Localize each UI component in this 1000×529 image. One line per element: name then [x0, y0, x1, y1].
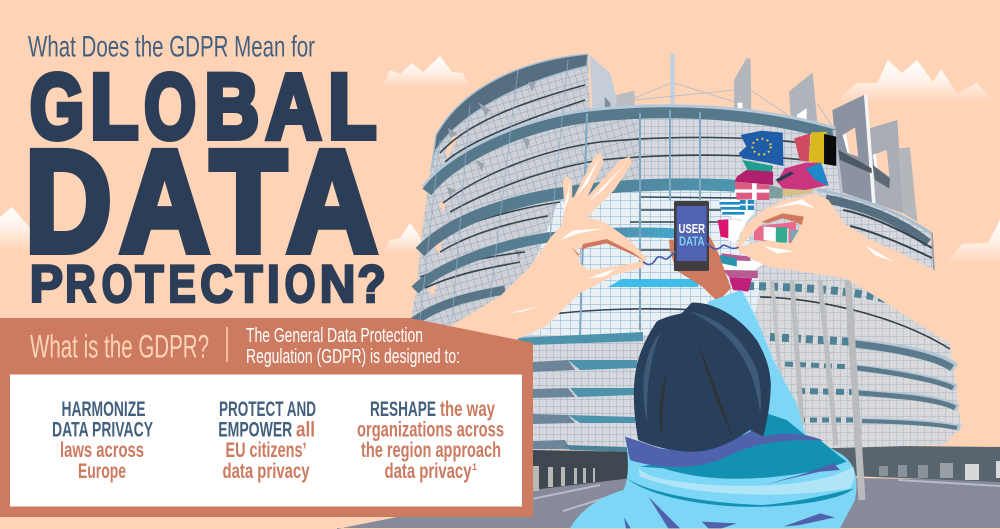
column: protect and empower: PROTECT AND — [219, 398, 316, 421]
title: global — [30, 56, 376, 158]
title: protection: ? — [357, 255, 386, 314]
column: harmonize: HARMONIZE — [62, 398, 146, 421]
hood — [570, 290, 856, 528]
title: data: A — [287, 121, 377, 282]
title: global: B — [204, 56, 259, 158]
building: rotunda body — [411, 55, 962, 450]
column: reshape: data privacy — [384, 460, 472, 483]
panel: what is the GDPR — [0, 318, 533, 517]
title: protection: P — [30, 255, 63, 314]
person seen from behind — [570, 290, 856, 528]
column: reshape: the way — [440, 398, 495, 421]
column: protect and empower — [218, 398, 316, 483]
title: protection: N — [320, 255, 356, 314]
title: protection — [30, 255, 386, 314]
rotunda window slots — [427, 133, 458, 296]
title: protection: C — [200, 255, 233, 314]
column: harmonize: DATA PRIVACY — [52, 418, 153, 442]
title: global: G — [30, 56, 84, 158]
column: harmonize: Europe — [78, 460, 126, 483]
column: reshape: organizations across — [357, 418, 504, 442]
data wire — [643, 243, 739, 265]
title: data — [25, 121, 377, 282]
flag fragments — [735, 160, 829, 200]
road — [337, 475, 1000, 529]
building towers behind the rotunda — [589, 53, 917, 222]
title: protection: R — [65, 255, 96, 314]
column: reshape — [357, 398, 504, 483]
right hand pinching data wire — [735, 194, 1000, 340]
title: global: L — [90, 56, 138, 158]
title: global: O — [144, 56, 196, 158]
column: reshape: 1 — [472, 462, 477, 472]
building: curved bands and floor lines — [413, 54, 934, 335]
column: reshape: RESHAPE — [370, 398, 436, 421]
white content box — [10, 374, 522, 506]
panel heading: What is the GDPR? — [30, 328, 209, 364]
phone showing user data: USER — [678, 221, 705, 236]
title: data: A — [120, 121, 209, 282]
lower flag fragments — [718, 219, 798, 292]
building: lower front bands — [515, 279, 960, 500]
column: protect and empower: EU citizens’ — [226, 439, 306, 462]
flag: Belgium — [794, 132, 836, 166]
column: protect and empower: all — [296, 418, 315, 442]
column: protect and empower: data privacy — [222, 460, 310, 483]
panel intro text: Regulation (GDPR) is designed to: — [246, 346, 460, 368]
title: global: A — [266, 56, 321, 158]
title: protection: T — [135, 255, 164, 314]
title lead-in: What Does the GDPR Mean for — [28, 30, 315, 64]
flag: Greece — [720, 199, 754, 222]
title: protection: T — [235, 255, 263, 314]
title: data: T — [210, 121, 286, 282]
left hand pinching data wire — [450, 153, 647, 342]
title: protection: O — [285, 255, 316, 314]
column: protect and empower: EMPOWER — [218, 418, 292, 442]
title: data: D — [25, 121, 112, 282]
column: harmonize — [52, 398, 153, 483]
phone showing user data — [674, 201, 709, 271]
title — [25, 30, 386, 314]
road markings — [532, 480, 1000, 511]
EU member state flags — [718, 131, 836, 292]
clouds — [0, 56, 1000, 264]
column: harmonize: laws across — [60, 439, 144, 462]
title: global: L — [328, 56, 376, 158]
title: protection: O — [102, 255, 133, 314]
hair — [634, 303, 771, 452]
building: base and pillars — [532, 445, 1000, 491]
title: protection: I — [267, 255, 280, 314]
phone showing user data: DATA — [679, 234, 705, 248]
panel intro text: The General Data Protection — [246, 325, 423, 347]
title: protection: E — [168, 255, 196, 314]
column: reshape: the region approach — [361, 439, 501, 462]
flag: EU — [739, 131, 783, 166]
smartphone hand — [669, 237, 731, 302]
panel intro text — [246, 325, 460, 368]
